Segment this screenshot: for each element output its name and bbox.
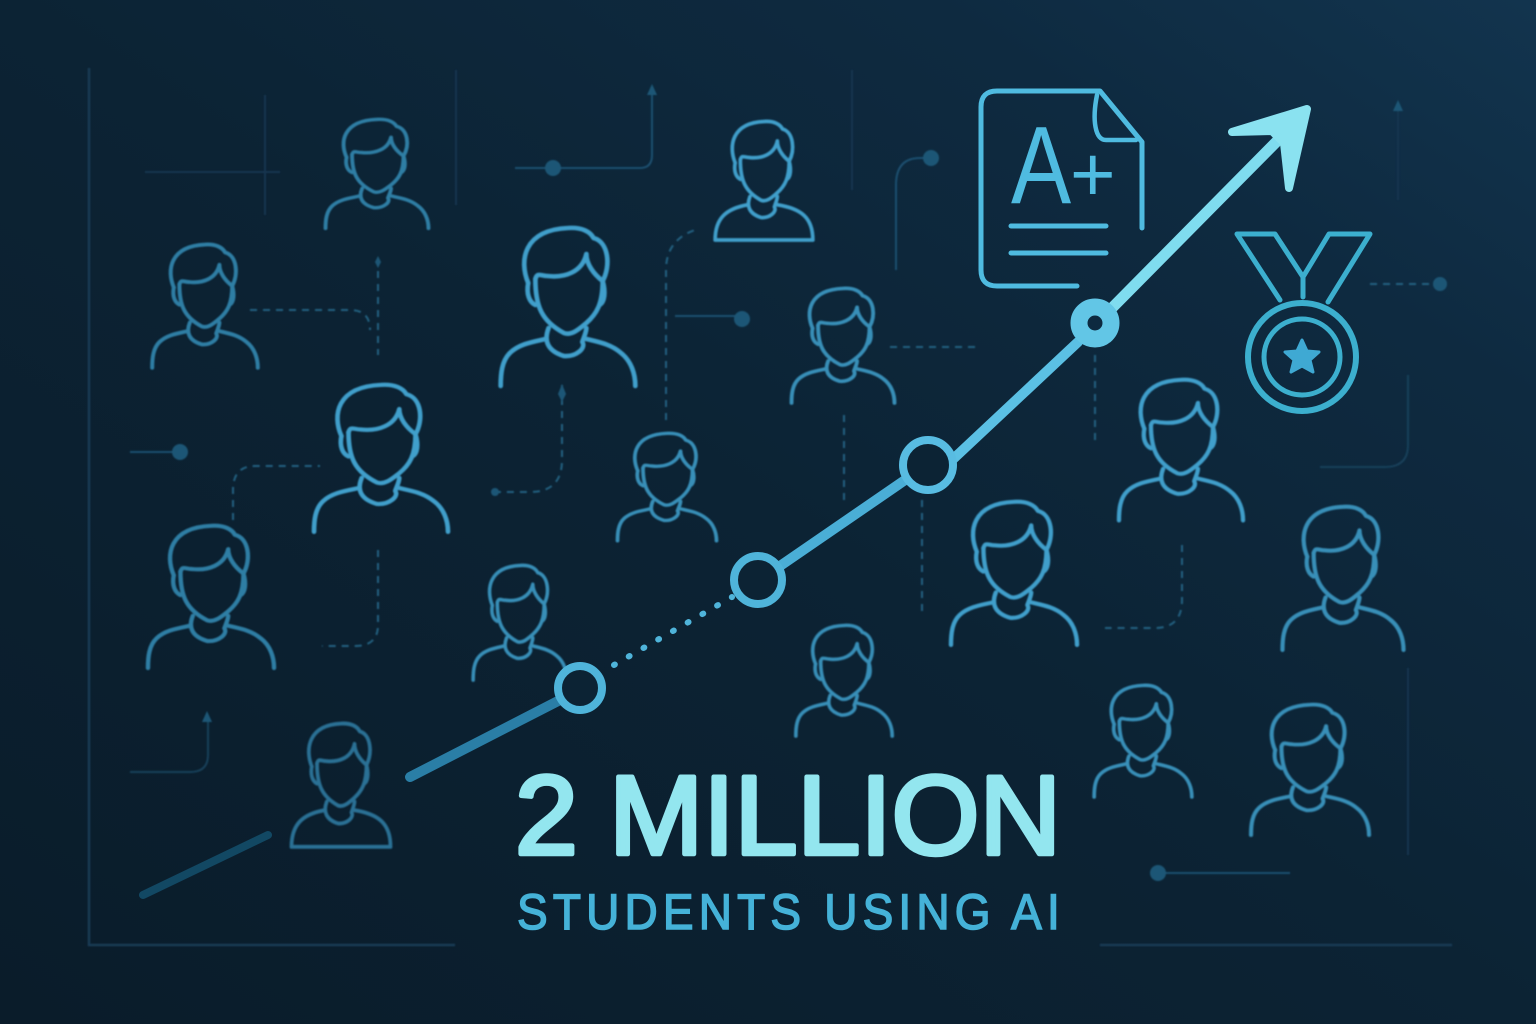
student 13 — [796, 625, 892, 736]
student 10 — [951, 502, 1077, 645]
student 6 — [314, 385, 448, 532]
student 2 — [152, 244, 258, 368]
fourth segment — [950, 342, 1078, 462]
subheading: STUDENTS USING AI — [517, 885, 1060, 940]
dotted segment — [614, 597, 732, 665]
arrowhead — [1232, 109, 1307, 188]
student 9 — [1119, 380, 1243, 520]
student 1 — [326, 119, 428, 228]
icon: medal — [1237, 234, 1370, 411]
second segment — [410, 700, 560, 777]
ribbon — [1237, 234, 1370, 302]
student 5 — [792, 288, 894, 403]
icon: graded document A+: + — [1070, 130, 1116, 218]
medal rings — [1248, 303, 1356, 411]
icon: graded document A+: A — [1011, 105, 1071, 227]
headline: 2 MILLION — [515, 753, 1061, 878]
growth line chart — [143, 109, 1307, 895]
student 15 — [1251, 705, 1369, 835]
final segment — [1110, 124, 1294, 310]
student 7 — [618, 433, 716, 541]
node 2 — [734, 556, 782, 604]
node 4 — [1079, 307, 1111, 339]
faint start segment — [143, 835, 268, 895]
student icons — [148, 119, 1404, 847]
icon: graded document A+ — [981, 91, 1142, 286]
student 8 — [148, 526, 274, 668]
connector network — [89, 68, 1452, 945]
student 11 — [1282, 507, 1404, 650]
student 12 — [473, 565, 567, 680]
node 1 — [558, 666, 602, 710]
student 4 — [501, 228, 635, 386]
student 14 — [1094, 685, 1192, 797]
student 16 — [292, 723, 390, 847]
third segment — [780, 478, 908, 566]
star — [1285, 340, 1319, 372]
student 3 — [715, 121, 813, 240]
node 3 — [903, 440, 953, 490]
